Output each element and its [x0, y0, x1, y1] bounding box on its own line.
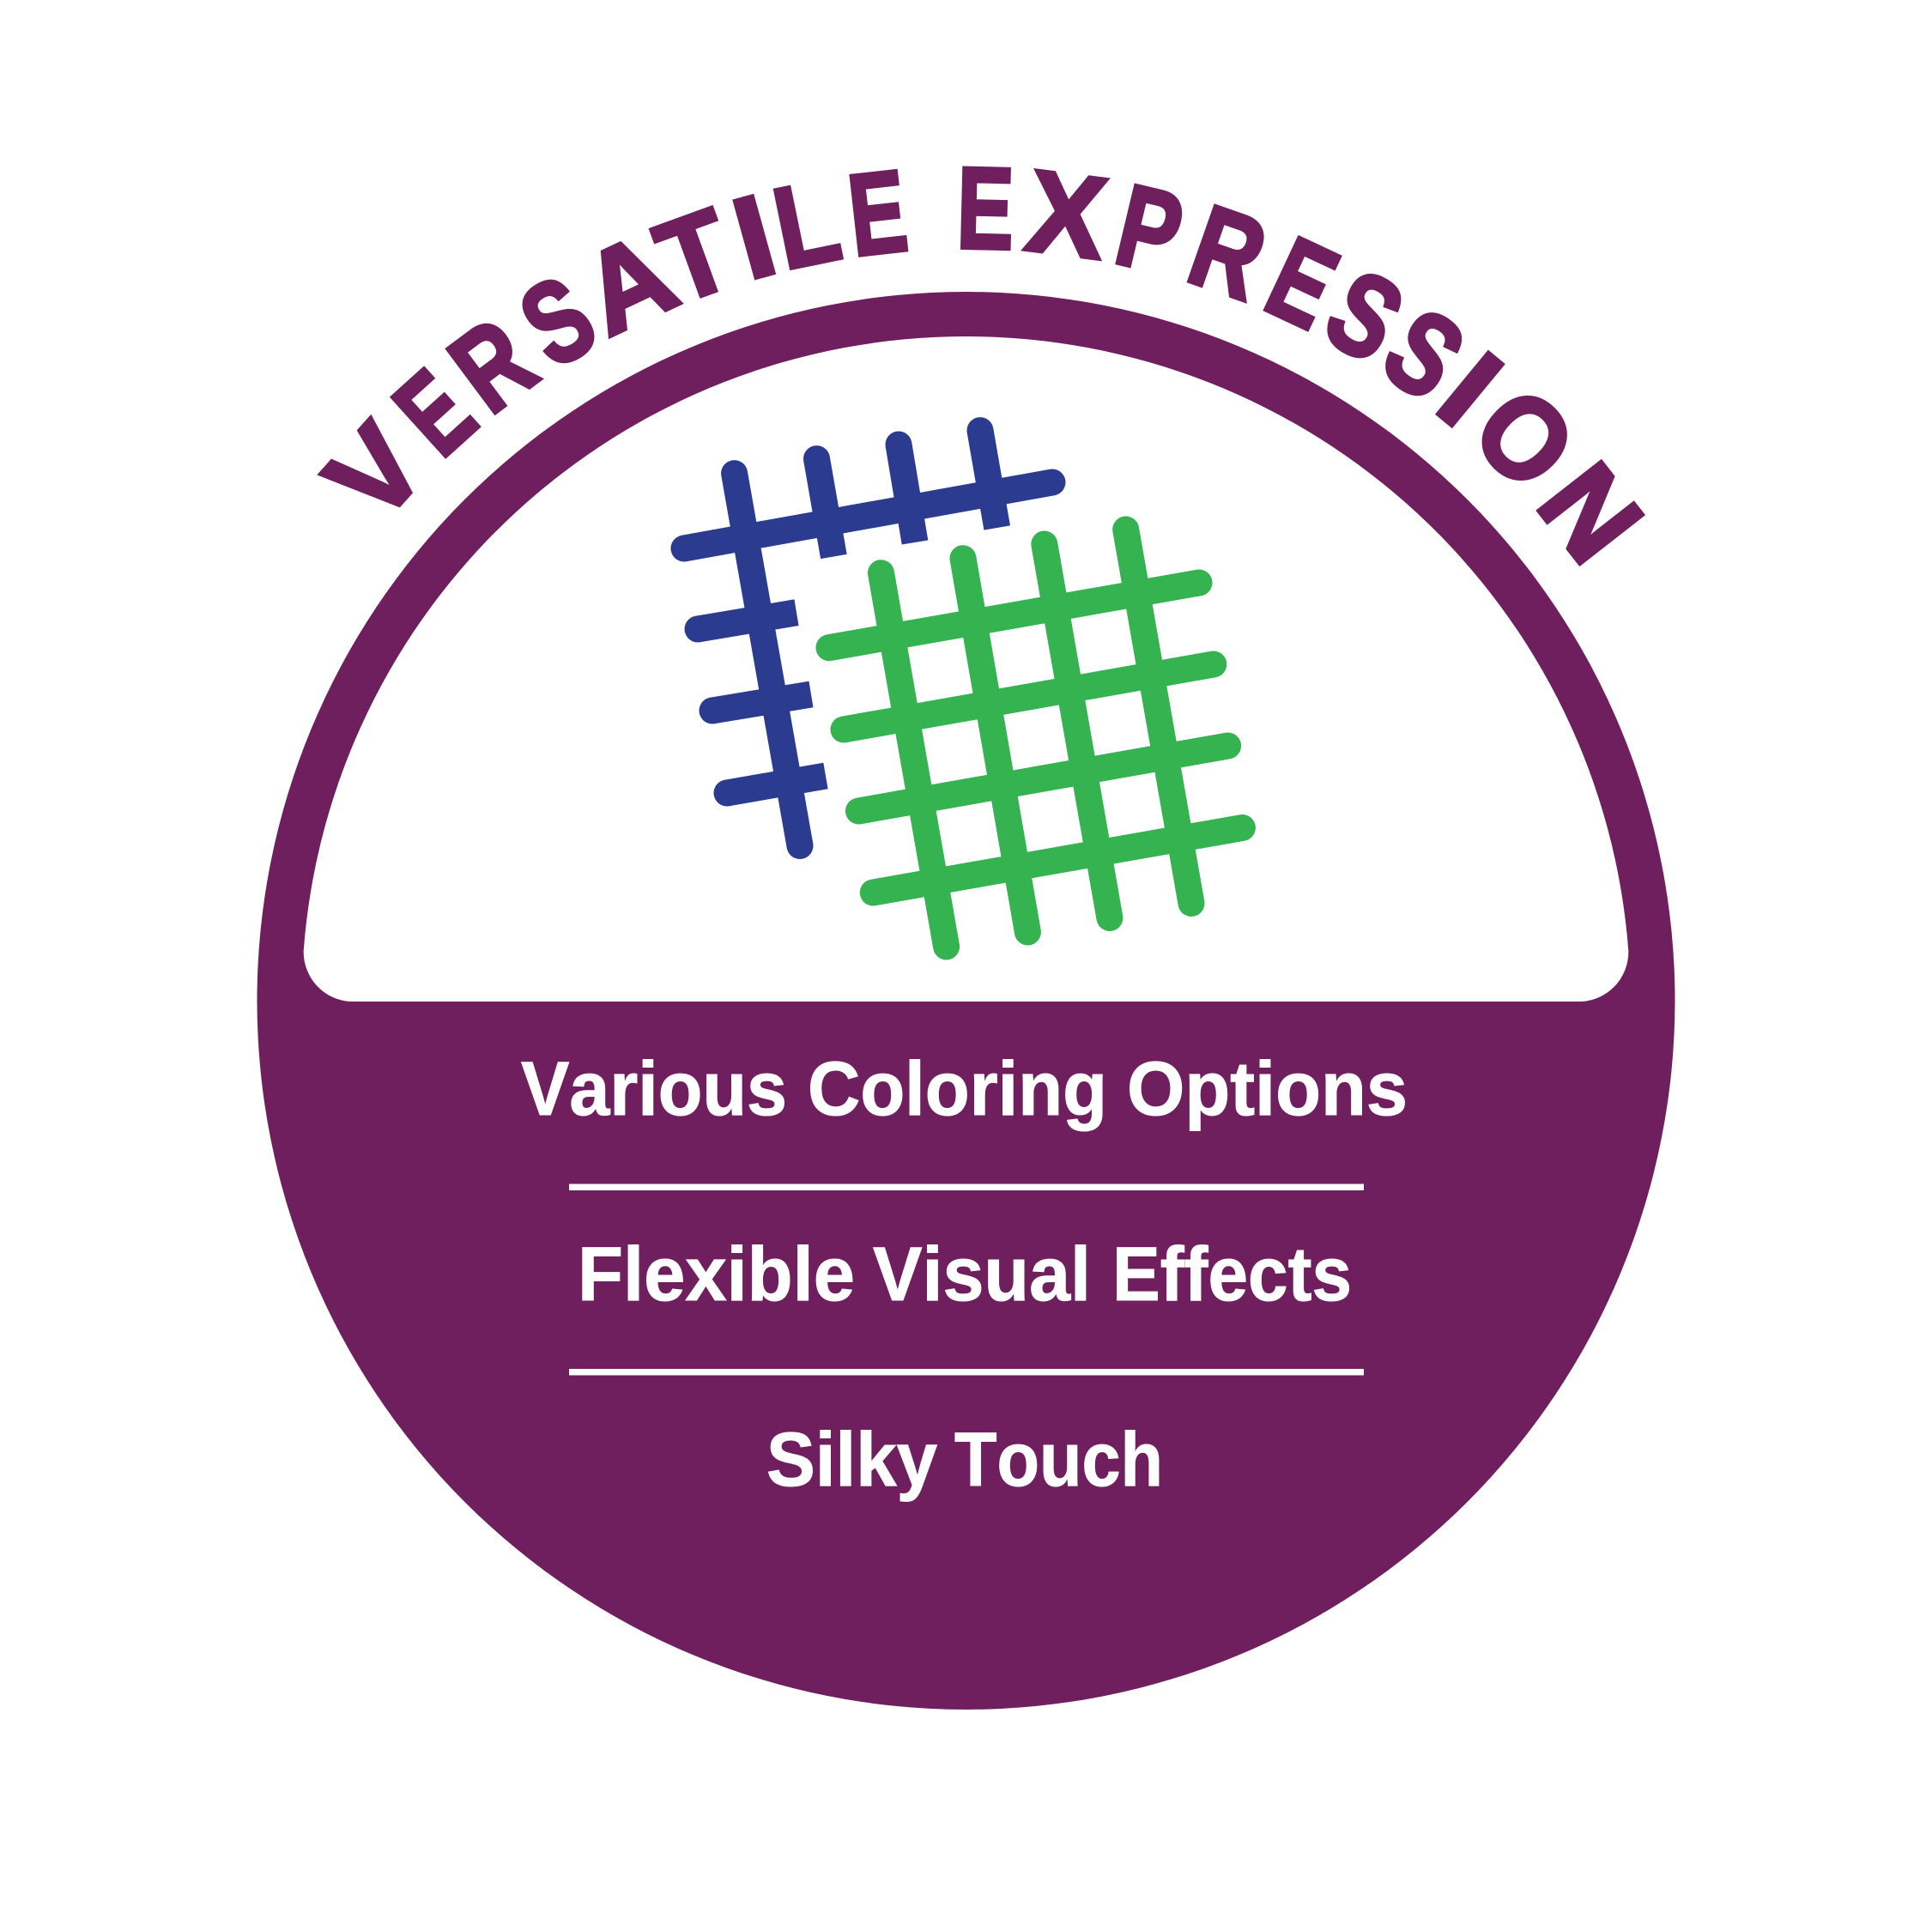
title: curved heading: E [843, 146, 913, 281]
text: various coloring options: Options [1127, 1045, 1408, 1131]
title: curved heading: T [641, 184, 748, 328]
title: curved heading: X [1021, 145, 1113, 284]
title: curved heading: I [1415, 328, 1525, 450]
title: curved heading: S [500, 251, 616, 392]
panel: purple circle [257, 292, 1675, 1710]
text: flexible visual effects [578, 1231, 1352, 1317]
panel: white dome window [304, 336, 1628, 1002]
text: flexible visual effects: Effects [1112, 1231, 1352, 1317]
icon: woven mesh [684, 417, 1242, 947]
title: curved heading: V [301, 401, 449, 544]
title: curved heading: P [1105, 159, 1194, 300]
icon part: green mesh [829, 530, 1242, 947]
title: curved heading: L [763, 154, 850, 294]
title: curved heading: R [427, 294, 557, 437]
text: various coloring options: Various [521, 1045, 787, 1131]
text: various coloring options: Coloring [808, 1045, 1107, 1131]
title: curved heading: I [720, 170, 788, 304]
title: curved heading [301, 143, 1667, 585]
text: silky touch [766, 1416, 1163, 1502]
title: curved heading: E [1249, 213, 1355, 354]
title: curved heading: N [1514, 440, 1667, 585]
title: curved heading: S [1362, 283, 1487, 424]
text: flexible visual effects: Visual [873, 1231, 1091, 1317]
text: silky touch: Touch [954, 1416, 1163, 1502]
title: curved heading: E [372, 347, 498, 479]
title: curved heading: A [563, 207, 694, 360]
text: various coloring options [521, 1045, 1408, 1131]
title: curved heading: E [955, 143, 1015, 275]
title: curved heading: O [1449, 363, 1600, 514]
icon part: blue mesh [684, 417, 1052, 846]
text: flexible visual effects: Flexible [578, 1231, 855, 1317]
divider 2 [569, 1369, 1364, 1375]
title: curved heading: S [1305, 245, 1424, 387]
title: curved heading: R [1174, 181, 1281, 325]
text: silky touch: Silky [766, 1416, 937, 1502]
divider 1 [569, 1184, 1364, 1190]
